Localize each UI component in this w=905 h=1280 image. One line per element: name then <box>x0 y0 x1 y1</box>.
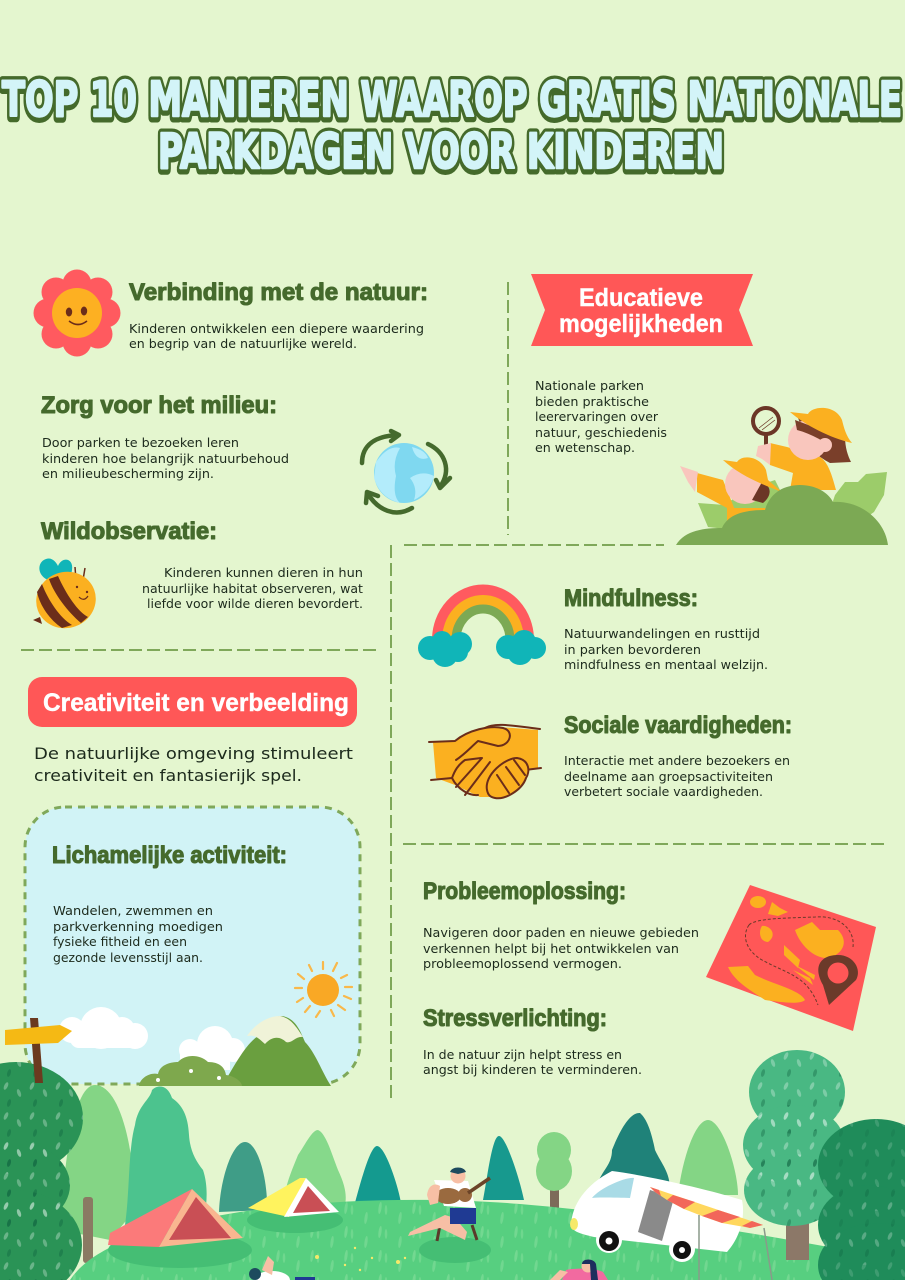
boy <box>727 508 772 522</box>
text block: kinderen hoe belangrijk natuurbehoud <box>42 451 289 466</box>
text block: De natuurlijke omgeving stimuleert <box>34 744 353 763</box>
bush <box>139 1056 242 1086</box>
text block: Wandelen, zwemmen en <box>53 903 213 918</box>
icon: treasure map <box>706 885 876 1031</box>
text block: Nationale parken <box>535 378 644 393</box>
text block: deelname aan groepsactiviteiten <box>564 769 773 784</box>
background trees <box>60 1085 738 1240</box>
magnifier <box>753 408 779 434</box>
bush <box>676 485 888 545</box>
banner heading: mogelijkheden <box>559 310 723 338</box>
banner heading <box>531 274 753 346</box>
red tent <box>108 1189 252 1268</box>
text block <box>423 925 699 971</box>
icon: sun <box>295 962 352 1017</box>
panel: lichamelijke activiteit <box>25 807 360 1086</box>
title <box>2 72 902 182</box>
person lying on the grass <box>249 1256 315 1280</box>
icon: rainbow with clouds <box>418 590 546 667</box>
icon: bee <box>28 559 104 637</box>
clouds <box>59 1007 245 1070</box>
panel: wildobservatie <box>28 518 363 637</box>
text block: mindfulness en mentaal welzijn. <box>564 657 768 672</box>
panel: educatieve mogelijkheden <box>531 274 888 545</box>
mountain <box>222 1016 331 1086</box>
text block: liefde voor wilde dieren bevordert. <box>147 596 363 611</box>
pill heading: Creativiteit en verbeelding <box>43 689 349 717</box>
text block <box>129 321 424 351</box>
text block: leerervaringen over <box>535 409 659 424</box>
yellow tent <box>247 1178 343 1233</box>
text block: fysieke fitheid en een <box>53 934 187 949</box>
panel: stressverlichting <box>423 1005 642 1077</box>
camper van <box>570 1171 772 1280</box>
text block: verkennen helpt bij het ontwikkelen van <box>423 941 679 956</box>
text block: In de natuur zijn helpt stress en <box>423 1047 622 1062</box>
text block <box>53 903 223 965</box>
panel: sociale vaardigheden <box>429 712 792 799</box>
text block <box>142 565 363 611</box>
text block: Interactie met andere bezoekers en <box>564 753 790 768</box>
heading: Stressverlichting: <box>423 1005 607 1032</box>
text block <box>423 1047 642 1077</box>
text block: gezonde levensstijl aan. <box>53 950 203 965</box>
text block: en begrip van de natuurlijke wereld. <box>129 336 357 351</box>
text block: creativiteit en fantasierijk spel. <box>34 766 302 785</box>
text block <box>34 744 353 785</box>
panel: verbinding met de natuur <box>34 270 428 356</box>
left tree <box>0 1062 83 1280</box>
text block: probleemoplossend vermogen. <box>423 956 622 971</box>
panel: probleemoplossing <box>423 878 876 1031</box>
icon: wooden signpost <box>5 1018 72 1083</box>
text block: natuur, geschiedenis <box>535 425 667 440</box>
post <box>83 1197 93 1263</box>
person sitting on the grass <box>550 1260 608 1280</box>
far right tree <box>818 1119 905 1280</box>
girl <box>770 443 836 490</box>
panel: creativiteit en verbeelding <box>28 677 357 785</box>
heading: Zorg voor het milieu: <box>41 392 277 419</box>
heading: Lichamelijke activiteit: <box>52 842 287 869</box>
heading: Mindfulness: <box>564 585 698 612</box>
text block: Kinderen kunnen dieren in hun <box>164 565 363 580</box>
icon: smiling flower <box>34 270 120 356</box>
panel background <box>25 807 360 1084</box>
forest scene <box>60 1050 905 1280</box>
text block: en milieubescherming zijn. <box>42 466 214 481</box>
icon: handshake <box>429 725 541 798</box>
text block: Kinderen ontwikkelen een diepere waardering <box>129 321 424 336</box>
text block: Door parken te bezoeken leren <box>42 435 239 450</box>
icon: children exploring with magnifier <box>676 408 888 545</box>
right tree <box>743 1050 845 1260</box>
panel: zorg voor het milieu <box>41 392 450 512</box>
guitar player <box>408 1168 491 1263</box>
text block <box>564 626 768 672</box>
text block: verbetert sociale vaardigheden. <box>564 784 763 799</box>
icon: earth with recycling arrows <box>362 431 450 512</box>
hill <box>70 1200 905 1280</box>
heading: Verbinding met de natuur: <box>129 279 428 306</box>
panel: mindfulness <box>418 585 768 672</box>
text block: natuurlijke habitat observeren, wat <box>142 581 363 596</box>
heading: Probleemoplossing: <box>423 878 626 905</box>
text block: Navigeren door paden en nieuwe gebieden <box>423 925 699 940</box>
text block <box>42 435 289 481</box>
text block: angst bij kinderen te verminderen. <box>423 1062 642 1077</box>
text block: bieden praktische <box>535 394 649 409</box>
pill heading <box>28 677 357 727</box>
fireflies <box>315 1247 406 1271</box>
heading: Sociale vaardigheden: <box>564 712 792 739</box>
text block: parkverkenning moedigen <box>53 919 223 934</box>
heading: Wildobservatie: <box>41 518 217 545</box>
text block: in parken bevorderen <box>564 642 701 657</box>
banner heading: Educatieve <box>579 284 703 312</box>
text block <box>564 753 790 799</box>
text block <box>535 378 667 455</box>
text block: Natuurwandelingen en rusttijd <box>564 626 760 641</box>
text block: en wetenschap. <box>535 440 635 455</box>
